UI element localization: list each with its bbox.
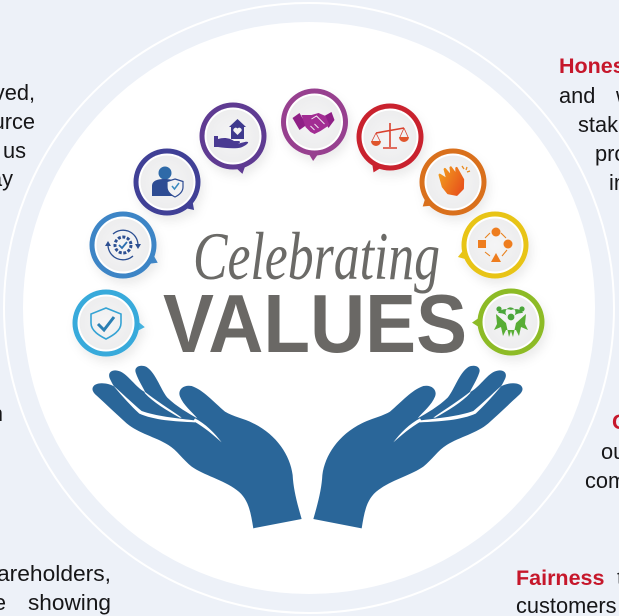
text block: fairness (cropped) — [516, 565, 619, 616]
bubble: scales — [356, 104, 424, 175]
text block: fairness (cropped): Fairness — [516, 566, 604, 590]
text block: honesty (cropped): stak — [578, 112, 618, 137]
bubble: people group — [472, 288, 544, 356]
title: Celebrating: Celebrating — [193, 218, 440, 294]
text block: left bottom (cropped) — [0, 561, 111, 615]
text block: honesty (cropped): and — [559, 83, 595, 108]
bubble: process cycle — [456, 212, 528, 278]
bubble: hand holding house — [200, 102, 266, 175]
bubble: handshake — [281, 88, 348, 161]
text block: left bottom (cropped): showing — [28, 590, 111, 615]
bubble: clapping hands — [419, 148, 486, 216]
bubble: gear cycle — [90, 212, 160, 278]
text block: left bottom (cropped): areholders, — [0, 561, 111, 586]
text block: left top (cropped): us — [3, 138, 26, 163]
text block: commitment (cropped) — [585, 410, 619, 493]
right hand — [313, 366, 523, 528]
title: VALUES: VALUES — [163, 277, 467, 370]
bubble: shield check — [72, 290, 145, 356]
bubble: person with shield — [134, 148, 200, 216]
left hand — [92, 366, 302, 528]
text block: honesty (cropped) — [559, 54, 619, 195]
text block: left top (cropped) — [0, 80, 35, 191]
